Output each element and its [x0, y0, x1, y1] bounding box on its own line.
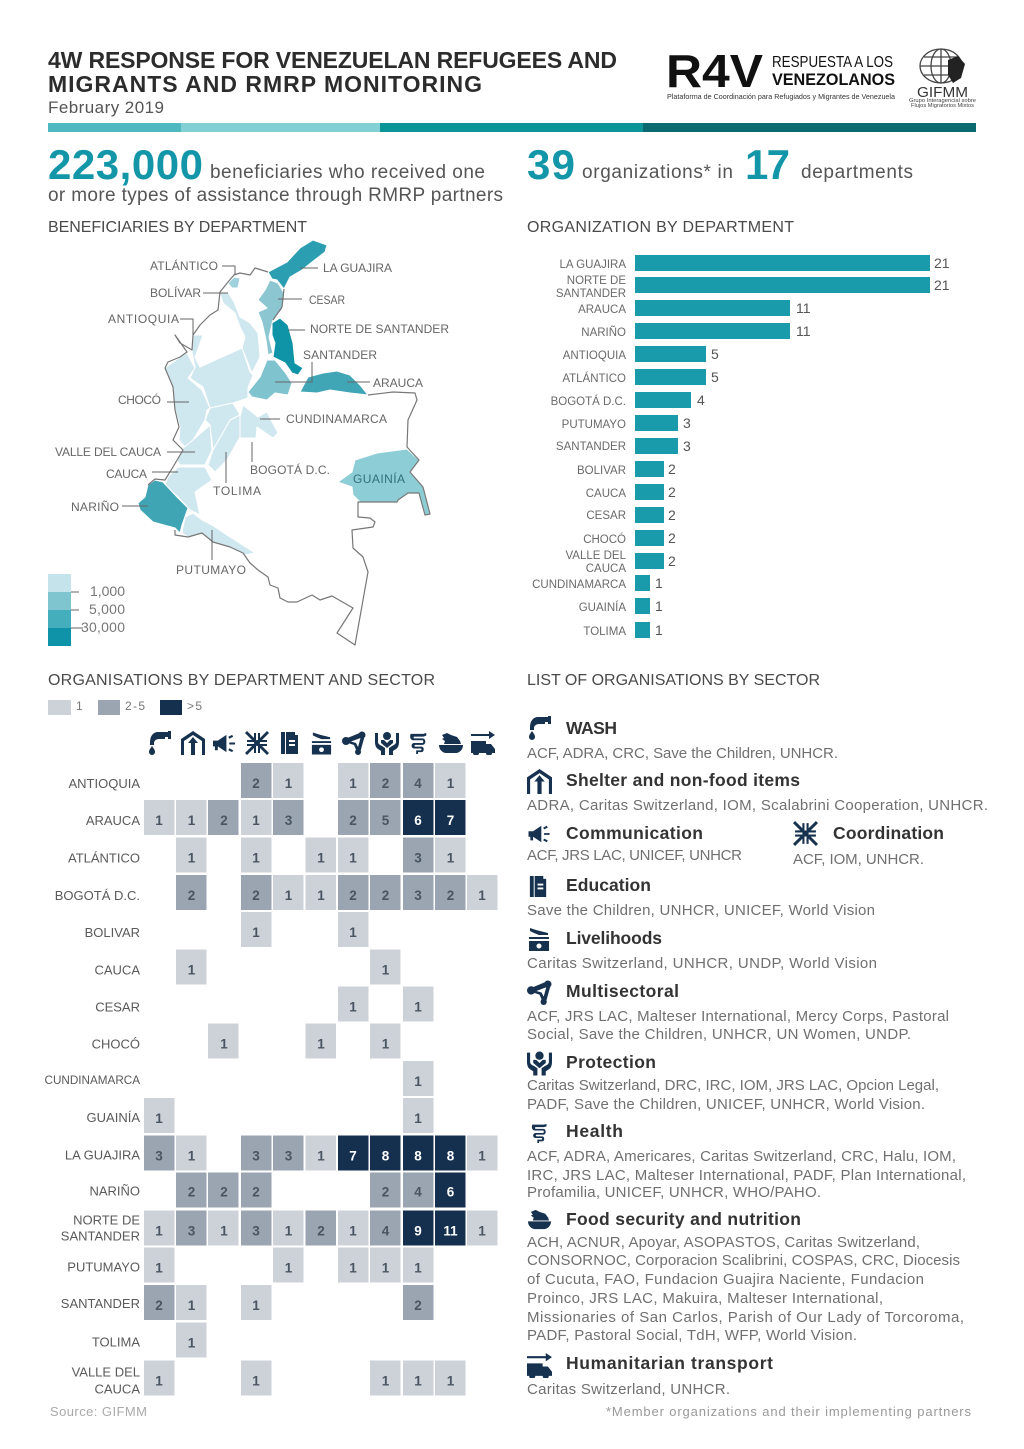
bar chart: organizations by department: GUAINÍA — [579, 601, 626, 614]
row: Norte de Santander: 3 — [188, 1224, 196, 1238]
row: Narino: NARIÑO — [89, 1184, 140, 1198]
title: MIGRANTS AND RMRP MONITORING — [48, 71, 482, 97]
map labels: TOLIMA — [213, 484, 261, 498]
sector: Food security and nutrition: Proinco, JRS LAC, Makuira, Malteser International, — [527, 1290, 883, 1307]
row: Valle del Cauca: CAUCA — [94, 1382, 140, 1396]
sector: Multisectoral: ACF, JRS LAC, Malteser International, Mercy Corps, Pastoral — [527, 1008, 949, 1025]
bar chart: organizations by department: 1 — [655, 575, 663, 591]
bar chart: organizations by department: CAUCA — [586, 563, 626, 575]
sector: Health: ACF, ADRA, Americares, Caritas Switzerland, CRC, Halu, IOM, — [527, 1148, 956, 1165]
row: Arauca: 1 — [188, 813, 196, 828]
bar chart: organizations by department: 1 — [655, 622, 663, 638]
sector: Food security and nutrition: Missionaries of San Carlos, Parish of Our Lady of Torcoroma, — [527, 1309, 964, 1326]
row: Narino: 6 — [447, 1184, 455, 1200]
bar chart: organizations by department: 2 — [668, 530, 676, 546]
map labels — [55, 258, 449, 577]
row: Choco: 1 — [382, 1036, 390, 1052]
matrix legend — [48, 699, 202, 715]
row: Choco: 1 — [220, 1036, 228, 1052]
row: Antioquia: 1 — [447, 776, 455, 791]
map labels: GUAINÍA — [353, 471, 405, 486]
key figure: beneficiaries: or more types of assistance through RMRP partners — [48, 185, 503, 206]
bar chart: organizations by department: 5 — [711, 346, 719, 362]
map labels: CHOCÓ — [118, 392, 161, 407]
row: Bogota: 2 — [252, 888, 260, 903]
row: Narino: 2 — [252, 1184, 260, 1200]
logo: R4V: R4V — [666, 45, 763, 97]
map labels: VALLE DEL CAUCA — [55, 445, 161, 459]
heading: organization by department: ORGANIZATION BY DEPARTMENT — [527, 219, 794, 236]
sector: Education — [527, 875, 875, 919]
row: La Guajira: LA GUAJIRA — [65, 1148, 140, 1162]
row: Bogota — [55, 875, 498, 910]
sector: Livelihoods: Caritas Switzerland, UNHCR, UNDP, World Vision — [527, 955, 877, 972]
row: Bogota: 2 — [188, 888, 195, 903]
bar chart: organizations by department: ATLÁNTICO — [562, 372, 626, 385]
row: Arauca: 2 — [220, 813, 228, 828]
row: Norte de Santander: 1 — [285, 1224, 293, 1238]
row: Guainia: 1 — [155, 1111, 163, 1126]
bar chart: organizations by department: SANTANDER — [556, 441, 626, 453]
sector: Coordination: ACF, IOM, UNHCR. — [793, 851, 924, 868]
row: Putumayo: 1 — [414, 1260, 422, 1276]
row: Bolivar: BOLIVAR — [85, 925, 140, 940]
row: Valle del Cauca: 1 — [382, 1374, 390, 1388]
logo: GIFMM: Grupo Interagencial sobre — [909, 98, 976, 104]
map labels: NARIÑO — [71, 500, 119, 514]
map labels: BOGOTÁ D.C. — [250, 462, 330, 477]
key figure: organizations: 17 — [745, 141, 790, 188]
choropleth map — [138, 240, 430, 645]
sector: WASH: ACF, ADRA, CRC, Save the Children, UNHCR. — [527, 745, 838, 762]
row: Atlantico: 1 — [349, 850, 357, 866]
sector: Protection: PADF, Save the Children, UNICEF, UNHCR, World Vision. — [527, 1096, 925, 1113]
heading: beneficiaries by department: BENEFICIARIES BY DEPARTMENT — [48, 219, 307, 236]
row: Tolima: 1 — [188, 1336, 196, 1350]
row: Putumayo: 1 — [285, 1260, 293, 1276]
sector: Communication — [527, 823, 742, 864]
map labels: CUNDINAMARCA — [286, 412, 387, 426]
row: Putumayo — [67, 1248, 434, 1282]
row: Valle del Cauca: 1 — [414, 1374, 422, 1388]
sector: Communication: Communication — [566, 823, 703, 843]
bar chart: organizations by department: 5 — [711, 369, 719, 385]
sector: Shelter — [527, 769, 988, 814]
row: Atlantico: ATLÁNTICO — [68, 850, 140, 866]
sector: Shelter: ADRA, Caritas Switzerland, IOM, Scalabrini Cooperation, UNHCR. — [527, 797, 988, 814]
row: Antioquia — [68, 763, 466, 798]
matrix legend: 1 — [76, 699, 83, 713]
row: Bogota: 1 — [285, 888, 293, 903]
row: Bogota: 1 — [317, 888, 325, 903]
map labels: CESAR — [309, 293, 345, 307]
map labels: LA GUAJIRA — [323, 261, 392, 275]
row: La Guajira: 8 — [382, 1148, 390, 1164]
row: Santander: 1 — [188, 1298, 196, 1313]
matrix legend: >5 — [187, 699, 202, 713]
bar chart: organizations by department: 21 — [934, 255, 950, 271]
sector: Food security and nutrition: Food security and nutrition — [566, 1209, 801, 1229]
row: Bolivar: 1 — [252, 925, 260, 940]
row: Bogota: 2 — [349, 888, 357, 903]
bar chart: organizations by department: ARAUCA — [578, 304, 626, 316]
map legend: 1,000 — [90, 583, 125, 599]
sector: Food security and nutrition: CONSORNOC, Corporacion Scalibrini, COSPAS, CRC, Diocesis — [527, 1252, 960, 1269]
row: Cauca: 1 — [188, 962, 196, 978]
bar chart: organizations by department: 2 — [668, 507, 676, 523]
sector: Shelter: Shelter and non-food items — [566, 770, 800, 790]
row: Putumayo: 1 — [155, 1260, 163, 1276]
map labels: ANTIOQUIA — [108, 312, 179, 326]
row: Putumayo: PUTUMAYO — [67, 1260, 140, 1274]
row: La Guajira: 8 — [414, 1148, 422, 1164]
sector: Education: Save the Children, UNHCR, UNICEF, World Vision — [527, 902, 875, 919]
header colour bar — [48, 123, 976, 132]
row: Norte de Santander: 1 — [155, 1224, 163, 1238]
row: Norte de Santander: 4 — [382, 1224, 390, 1238]
row: Norte de Santander: 1 — [478, 1224, 486, 1238]
bar chart: organizations by department: 2 — [668, 553, 676, 569]
bar chart: organizations by department: NARIÑO — [581, 326, 626, 339]
row: Cesar: 1 — [414, 1000, 422, 1014]
row: Atlantico: 1 — [317, 850, 325, 866]
sector icons row — [149, 731, 495, 756]
row: Santander — [61, 1285, 434, 1320]
row: Norte de Santander: SANTANDER — [61, 1228, 140, 1244]
row: La Guajira: 8 — [447, 1148, 455, 1164]
key figure: organizations: organizations* in — [582, 162, 733, 183]
row: Valle del Cauca: 1 — [252, 1374, 260, 1388]
map legend: 30,000 — [81, 619, 125, 635]
key figure: organizations — [527, 141, 913, 188]
bar chart: organizations by department: NORTE DE — [567, 275, 626, 287]
sector: Health: Profamilia, UNICEF, UNHCR, WHO/PAHO. — [527, 1184, 821, 1201]
row: Norte de Santander: 1 — [220, 1224, 228, 1238]
row: Guainia: GUAINÍA — [87, 1110, 140, 1125]
row: Valle del Cauca: 1 — [447, 1374, 455, 1388]
sector: Food security and nutrition: of Cucuta, FAO, Fundacion Guajira Naciente, Fundacion — [527, 1271, 924, 1288]
sector: Multisectoral — [527, 981, 949, 1043]
map labels: SANTANDER — [303, 348, 377, 362]
bar chart: organizations by department: LA GUAJIRA — [560, 259, 626, 271]
bar chart: organizations by department: 4 — [697, 392, 705, 408]
logo: R4V — [666, 45, 896, 101]
bar chart: organizations by department: 11 — [796, 323, 811, 339]
row: La Guajira: 1 — [188, 1148, 196, 1164]
sector: Multisectoral: Social, Save the Children, UNHCR, UN Women, UNDP. — [527, 1026, 911, 1043]
bar chart: organizations by department: PUTUMAYO — [562, 419, 626, 431]
bar chart: organizations by department: CAUCA — [586, 488, 626, 500]
row: Bogota: 2 — [382, 888, 389, 903]
row: Choco: 1 — [317, 1036, 325, 1052]
sector: Livelihoods: Livelihoods — [566, 928, 662, 948]
map labels: PUTUMAYO — [176, 563, 246, 577]
row: La Guajira: 1 — [478, 1148, 486, 1164]
row: Antioquia: 4 — [414, 776, 422, 791]
logo: R4V: RESPUESTA A LOS — [772, 54, 893, 71]
row: Tolima: TOLIMA — [92, 1334, 140, 1350]
sector: Education: Education — [566, 875, 651, 895]
row: Bogota: 3 — [414, 888, 422, 903]
row: Atlantico: 1 — [188, 850, 196, 866]
row: Choco — [92, 1024, 400, 1058]
row: Choco: CHOCÓ — [92, 1036, 140, 1052]
row: Cauca: CAUCA — [94, 962, 140, 978]
row: Cauca: 1 — [382, 962, 390, 978]
row: Cesar: 1 — [349, 1000, 357, 1014]
bar chart: organizations by department: BOLIVAR — [577, 465, 626, 477]
bar chart: organizations by department: ANTIOQUIA — [563, 350, 626, 362]
row: Norte de Santander: 2 — [317, 1224, 325, 1238]
sector: Humanitarian transport — [527, 1353, 773, 1398]
key figure: beneficiaries — [48, 141, 503, 206]
row: Norte de Santander: 11 — [443, 1224, 458, 1238]
row: Santander: 2 — [414, 1298, 422, 1313]
row: Arauca: 7 — [447, 813, 454, 828]
row: Antioquia: 1 — [349, 776, 357, 791]
sector: Health: Health — [566, 1121, 623, 1141]
sector: Food security and nutrition: ACH, ACNUR, Apoyar, ASOPASTOS, Caritas Switzerland, — [527, 1234, 920, 1251]
row: Santander: 2 — [155, 1298, 163, 1313]
sector by department matrix — [45, 763, 498, 1396]
sector: Multisectoral: Multisectoral — [566, 981, 679, 1001]
bar chart: organizations by department: 3 — [683, 438, 691, 454]
row: Arauca: 2 — [349, 813, 357, 828]
sector: Health — [527, 1121, 966, 1201]
row: Narino — [89, 1172, 466, 1208]
row: Santander: 1 — [252, 1298, 260, 1313]
sector: Food security and nutrition: PADF, Pastoral Social, TdH, WFP, World Vision. — [527, 1327, 857, 1344]
sector: Protection: Caritas Switzerland, DRC, IRC, IOM, JRS LAC, Opcion Legal, — [527, 1077, 939, 1094]
bar chart: organizations by department: 2 — [668, 484, 676, 500]
logo: R4V: VENEZOLANOS — [772, 70, 895, 89]
bar chart: organizations by department: SANTANDER — [556, 288, 626, 300]
row: Bolivar — [85, 912, 368, 947]
row: Putumayo: 1 — [349, 1260, 357, 1276]
row: Bolivar: 1 — [349, 925, 357, 940]
map labels: ATLÁNTICO — [150, 258, 218, 273]
row: Bogota: 1 — [478, 888, 486, 903]
row: Arauca: 1 — [252, 813, 260, 828]
row: Norte de Santander: NORTE DE — [73, 1212, 140, 1228]
row: La Guajira: 1 — [317, 1148, 325, 1164]
bar chart: organizations by department: 2 — [668, 461, 676, 477]
row: Arauca: 3 — [285, 813, 293, 828]
row: Norte de Santander: 9 — [414, 1224, 422, 1238]
sector: Humanitarian transport: Humanitarian transport — [566, 1353, 773, 1373]
row: Atlantico: 1 — [252, 850, 260, 866]
sector: Livelihoods — [527, 928, 877, 972]
row: Santander: SANTANDER — [61, 1296, 140, 1311]
row: Norte de Santander: 3 — [252, 1224, 260, 1238]
footnote: *Member organizations and their implementing partners — [606, 1404, 972, 1419]
row: Atlantico: 3 — [414, 850, 422, 866]
row: Arauca — [86, 800, 466, 835]
row: Narino: 2 — [382, 1184, 389, 1200]
row: Valle del Cauca — [72, 1360, 466, 1396]
title — [48, 47, 617, 97]
map labels: CAUCA — [106, 467, 147, 481]
sector: Humanitarian transport: Caritas Switzerland, UNHCR. — [527, 1381, 730, 1398]
bar chart: organizations by department: CUNDINAMARCA — [532, 579, 626, 591]
row: Cesar — [95, 986, 434, 1022]
logo: GIFMM: GIFMM — [917, 84, 968, 101]
sector: Protection: Protection — [566, 1052, 656, 1072]
bar chart: organizations by department: BOGOTÁ D.C. — [551, 395, 626, 408]
row: Norte de Santander: 1 — [349, 1224, 357, 1238]
bar chart: organizations by department — [532, 255, 950, 638]
map legend — [48, 574, 125, 646]
row: Norte de Santander — [61, 1210, 498, 1246]
key figure: organizations: departments — [801, 162, 913, 183]
row: Cundinamarca — [45, 1061, 434, 1096]
key figure: beneficiaries: beneficiaries who received one — [210, 162, 485, 183]
date: February 2019 — [48, 98, 164, 117]
row: Valle del Cauca: VALLE DEL — [72, 1364, 140, 1380]
bar chart: organizations by department: CESAR — [586, 510, 626, 522]
row: Narino: 2 — [188, 1184, 195, 1200]
row: Atlantico: 1 — [447, 850, 455, 866]
sector: Coordination: Coordination — [833, 823, 944, 843]
row: Guainia — [87, 1098, 434, 1133]
row: Cauca — [94, 950, 400, 984]
row: La Guajira: 3 — [252, 1148, 260, 1164]
bar chart: organizations by department: 11 — [796, 300, 811, 316]
bar chart: organizations by department: 3 — [683, 415, 691, 431]
row: Putumayo: 1 — [382, 1260, 390, 1276]
row: Cundinamarca: CUNDINAMARCA — [45, 1074, 140, 1087]
title: 4W RESPONSE FOR VENEZUELAN REFUGEES AND — [48, 47, 617, 73]
sector: WASH: WASH — [566, 718, 617, 738]
key figure: organizations: 39 — [527, 141, 575, 188]
matrix legend: 2-5 — [125, 699, 145, 713]
bar chart: organizations by department: 21 — [934, 277, 950, 293]
row: Antioquia: ANTIOQUIA — [68, 776, 140, 791]
bar chart: organizations by department: 1 — [655, 598, 663, 614]
logo: GIFMM: Flujos Migratorios Mixtos — [911, 103, 975, 109]
row: Arauca: ARAUCA — [86, 813, 140, 828]
row: Guainia: 1 — [414, 1111, 422, 1126]
row: La Guajira: 3 — [285, 1148, 293, 1164]
row: La Guajira: 3 — [155, 1148, 163, 1164]
row: Arauca: 1 — [155, 813, 163, 828]
row: Narino: 2 — [220, 1184, 228, 1200]
row: Atlantico — [68, 838, 466, 872]
row: Tolima — [92, 1322, 206, 1358]
row: Bogota: 2 — [447, 888, 454, 903]
heading: organisations by department and sector: ORGANISATIONS BY DEPARTMENT AND SECTOR — [48, 672, 435, 689]
sector: WASH — [527, 716, 838, 762]
sector: Communication: ACF, JRS LAC, UNICEF, UNHCR — [527, 847, 742, 864]
logo: GIFMM — [909, 49, 976, 109]
heading: list of organisations by sector: LIST OF ORGANISATIONS BY SECTOR — [527, 672, 820, 689]
bar chart: organizations by department: TOLIMA — [583, 626, 626, 638]
sector: Protection — [527, 1052, 939, 1113]
row: Cundinamarca: 1 — [414, 1074, 422, 1089]
row: La Guajira — [65, 1136, 498, 1170]
key figure: beneficiaries: 223,000 — [48, 141, 203, 188]
map labels: ARAUCA — [373, 376, 423, 390]
sector: Food security and nutrition — [527, 1209, 964, 1344]
sector: Health: IRC, JRS LAC, Malteser International, PADF, Plan International, — [527, 1167, 966, 1184]
row: Antioquia: 2 — [382, 776, 389, 791]
source note: Source: GIFMM — [50, 1404, 147, 1419]
map legend: 5,000 — [89, 601, 125, 617]
row: Cesar: CESAR — [95, 1000, 140, 1014]
row: Valle del Cauca: 1 — [155, 1374, 163, 1388]
row: Bogota: BOGOTÁ D.C. — [55, 888, 140, 903]
map labels: NORTE DE SANTANDER — [310, 322, 449, 336]
row: Narino: 4 — [414, 1184, 422, 1200]
row: La Guajira: 7 — [349, 1148, 357, 1164]
bar chart: organizations by department: CHOCÓ — [583, 533, 626, 546]
row: Antioquia: 2 — [252, 776, 260, 791]
map labels: BOLÍVAR — [150, 285, 201, 300]
row: Arauca: 5 — [382, 813, 390, 828]
logo: R4V: Plataforma de Coordinación para Refugiados y Migrantes de Venezuela — [667, 92, 896, 101]
sector: Coordination — [793, 821, 944, 868]
row: Arauca: 6 — [414, 813, 422, 828]
bar chart: organizations by department: VALLE DEL — [565, 550, 627, 562]
row: Antioquia: 1 — [285, 776, 293, 791]
